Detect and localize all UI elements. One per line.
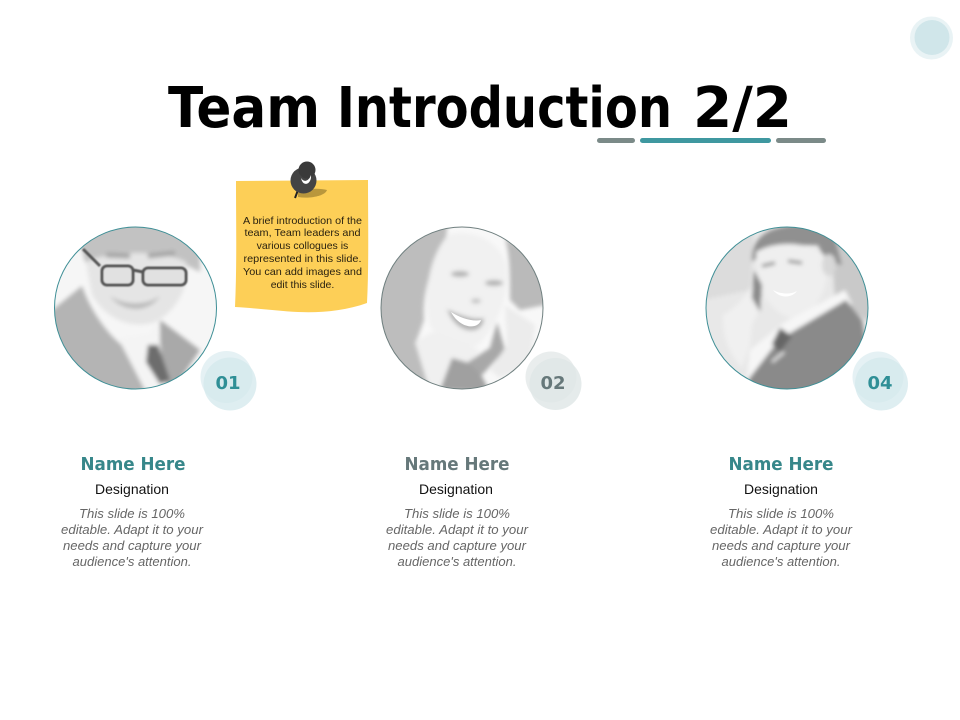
description 01: [61, 506, 204, 569]
title: Introduction: [337, 76, 672, 141]
photo: man with glasses: [54, 226, 217, 390]
smile: [774, 290, 796, 296]
description 04: [710, 506, 853, 569]
suit: [748, 300, 874, 394]
team member 04: [702, 222, 908, 569]
title: Team: [168, 76, 320, 141]
description 02: [386, 506, 529, 569]
mouth shadow: [447, 309, 484, 331]
face: [430, 238, 446, 272]
note text: [243, 215, 362, 291]
number badge 04: [852, 352, 908, 410]
description 01: audience's attention.: [72, 554, 192, 569]
photo: woman smiling: [380, 226, 544, 390]
number badge 02: 02: [540, 373, 566, 394]
designation 04: Designation: [744, 481, 818, 497]
note text: various collogues is: [257, 240, 348, 252]
hand: [493, 310, 534, 376]
team member 02: [376, 222, 582, 569]
number badge 01: [200, 351, 256, 410]
eye shadows: [106, 253, 175, 256]
note text: edit this slide.: [271, 279, 334, 291]
name 04: Name Here: [728, 455, 834, 475]
shirt: [747, 289, 853, 380]
description 04: needs and capture your: [712, 538, 851, 553]
description 01: needs and capture your: [63, 538, 202, 553]
description 04: This slide is 100%: [728, 506, 834, 521]
sticky note: [235, 162, 368, 312]
note text: represented in this slide.: [244, 253, 362, 265]
note text: A brief introduction of the: [243, 215, 362, 227]
note text: team, Team leaders and: [244, 227, 361, 239]
title underline bars: [597, 138, 826, 143]
tie: [772, 328, 792, 352]
description 04: editable. Adapt it to your: [710, 522, 853, 537]
glasses: [83, 249, 186, 285]
nose: [471, 298, 481, 304]
phone: [752, 270, 762, 312]
curls near neck: [468, 322, 505, 375]
smile: [110, 296, 160, 309]
hair and forehead: [80, 228, 202, 272]
tie: [146, 345, 170, 384]
background left: [708, 236, 753, 298]
description 01: This slide is 100%: [79, 506, 185, 521]
team member 01: [50, 222, 256, 569]
number badge 02: [526, 352, 582, 410]
eyes: [451, 271, 469, 277]
smile: [451, 312, 481, 326]
designation 01: Designation: [95, 481, 169, 497]
description 04: audience's attention.: [722, 554, 840, 569]
photo: man on phone: [706, 226, 868, 390]
designation 02: Designation: [419, 481, 493, 497]
neck: [427, 354, 472, 384]
ear: [822, 254, 836, 276]
note paper: [235, 180, 368, 312]
description 02: This slide is 100%: [404, 506, 510, 521]
coat: [55, 285, 146, 388]
number badge 01: 01: [215, 373, 241, 394]
note text: You can add images and: [243, 266, 362, 278]
hair: [752, 225, 842, 265]
background right: [832, 245, 868, 322]
decorative circles: top right: [910, 16, 953, 60]
description 01: editable. Adapt it to your: [61, 522, 204, 537]
description 02: editable. Adapt it to your: [386, 522, 529, 537]
face: [86, 253, 187, 324]
title: 2/2: [693, 76, 792, 141]
name 02: Name Here: [404, 455, 510, 475]
top: [440, 358, 490, 392]
name 01: Name Here: [80, 455, 186, 475]
lapel stripe: [772, 352, 784, 362]
hand: [747, 288, 762, 312]
face: [754, 241, 826, 294]
hair right: [505, 238, 545, 310]
shirt: [123, 344, 168, 388]
description 02: audience's attention.: [398, 554, 516, 569]
eyes: [762, 261, 802, 266]
hair left: [382, 228, 450, 381]
icon: push pin: [290, 162, 327, 198]
description 02: needs and capture your: [388, 538, 527, 553]
number badge 04: 04: [867, 373, 893, 394]
title: [168, 76, 792, 141]
